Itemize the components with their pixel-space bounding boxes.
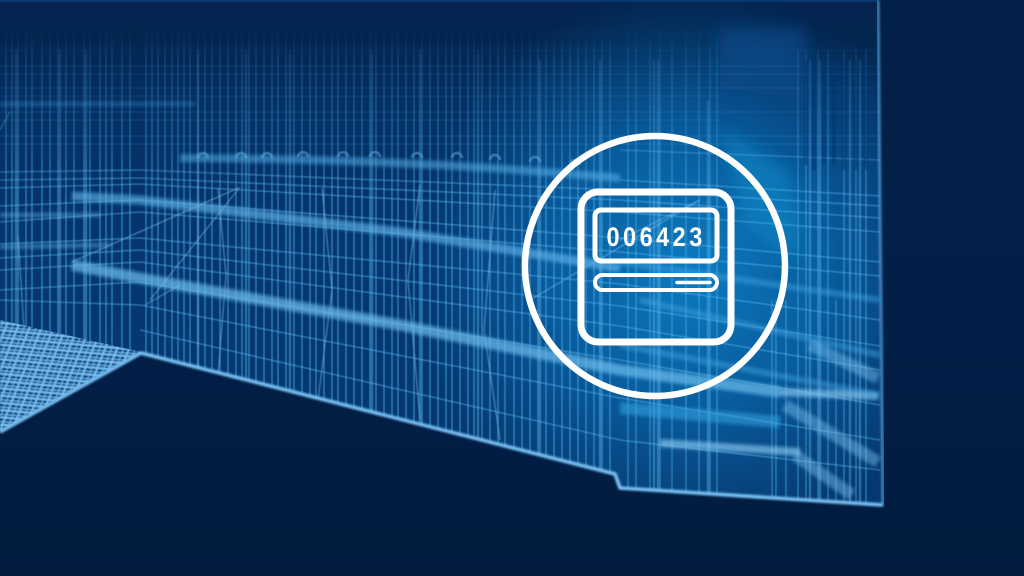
wall corner edges bbox=[0, 0, 883, 505]
wireframe building bbox=[0, 0, 883, 510]
machinery row along rail bbox=[198, 152, 580, 165]
panel: wireframe wall bbox=[0, 0, 883, 505]
meter reading: 006423 bbox=[606, 223, 706, 252]
icon: electricity meter in circle bbox=[525, 136, 785, 396]
meter body bbox=[581, 192, 731, 342]
meter display bbox=[595, 210, 717, 261]
floor mesh bbox=[0, 320, 140, 431]
right-hand rack bars bbox=[806, 60, 866, 170]
meter slot bbox=[595, 275, 717, 290]
icon ring bbox=[525, 136, 785, 396]
slot indicator bbox=[677, 281, 710, 284]
